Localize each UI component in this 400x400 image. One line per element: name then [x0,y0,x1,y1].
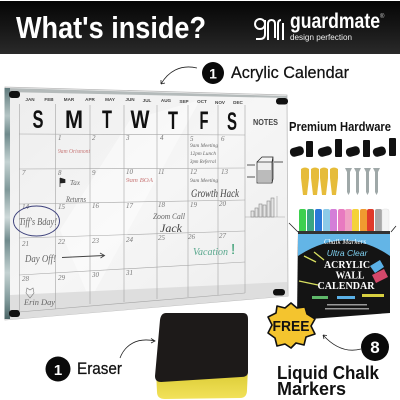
handwritten notes: Erin Day [23,297,55,307]
sketch: bar chart [251,198,274,217]
month row: JAN [25,97,35,102]
date numbers: 8 [58,169,62,177]
panel: acrylic calendar board [4,87,288,320]
circled note [14,206,60,236]
handwritten notes: 3pm Referral [189,158,216,165]
handwritten notes: Returns [65,195,86,204]
month row: FEB [44,97,54,102]
handwritten notes [23,143,240,307]
panel: marker box: Ultra Clear [327,248,368,258]
notes column: NOTES [253,117,278,127]
date numbers: 10 [126,168,134,176]
month row [25,97,244,105]
handwritten notes: 9am Meeting [190,143,218,149]
date numbers: 19 [190,201,198,209]
label: liquid chalk markers: Markers [277,379,346,399]
date numbers: 31 [125,269,133,277]
callout: acrylic calendar [202,62,349,84]
date numbers: 2 [92,134,96,142]
arrow: day off [62,253,104,258]
weekday letters: S [32,106,44,134]
date numbers: 11 [158,168,164,176]
circled note: Tiff's Bday! [19,217,57,228]
handwritten notes: 9am BOA [126,177,153,184]
callout: acrylic calendar: Acrylic Calendar [231,63,349,82]
callout: markers count [361,333,389,361]
date numbers: 9 [92,169,96,177]
date numbers: 18 [158,201,166,209]
date numbers: 4 [160,134,164,142]
panel: eraser [155,313,248,399]
header band [0,1,400,54]
handwritten notes: 9am Meeting [190,178,218,184]
handwritten notes: Vacation [193,246,228,258]
month row: JUN [125,97,135,102]
date numbers: 15 [58,203,66,211]
badge: free [268,303,315,348]
arrow: to calendar [161,67,197,84]
icons: grey screws [345,168,380,195]
logo: guardmate: design perfection [290,33,352,42]
month row: JUL [143,98,152,103]
month row: NOV [215,100,226,105]
panel: marker box [289,223,396,320]
calendar grid [19,104,285,312]
date numbers: 27 [219,232,226,240]
weekday letters: M [65,106,83,134]
date numbers: 20 [219,200,226,208]
arrow: to markers [323,335,361,350]
label: liquid chalk markers [277,363,380,399]
weekday letters: T [168,107,178,135]
date numbers: 3 [125,134,130,142]
panel: marker box: CALENDAR [318,281,375,292]
date numbers: 23 [92,237,100,245]
date numbers: 16 [92,202,100,210]
weekday letters [32,106,237,136]
date numbers: 7 [22,169,26,177]
handwritten notes: Growth Hack [191,186,240,200]
date numbers: 12 [190,168,198,176]
label: liquid chalk markers: Liquid Chalk [277,363,380,383]
month row: DEC [233,100,244,105]
sketch: box [247,157,283,183]
date numbers: 29 [58,274,66,282]
month row: MAR [64,97,75,102]
icons: black standoff barrels [289,138,396,158]
handwritten notes: 12pm Lunch [190,151,216,157]
callout: markers count: 8 [370,338,380,357]
panel: marker box: Chalk Markers [324,238,366,246]
month row: SEP [179,99,189,104]
month row: APR [85,97,96,102]
month row: MAY [105,97,115,102]
date numbers: 1 [58,134,62,142]
notes column [247,117,283,217]
weekday letters: F [200,107,208,135]
month row: OCT [197,99,207,104]
weekday letters: T [102,106,112,134]
callout: acrylic calendar: 1 [209,66,217,82]
reflection bands [60,100,200,300]
handwritten notes: Tax [70,179,81,187]
callout: eraser: Eraser [77,359,122,378]
weekday letters: W [130,106,150,134]
month row: AUG [161,98,172,103]
callout: eraser: 1 [54,362,62,379]
date numbers: 25 [158,234,166,242]
title: What's inside? [16,10,206,45]
date numbers: 28 [22,275,30,283]
date numbers: 5 [190,135,194,143]
mounting pins [9,91,288,317]
logo: guardmate: ® [380,13,385,20]
arrow: to eraser [120,338,155,358]
logo: guardmate [255,10,385,42]
date numbers: 13 [221,168,228,176]
handwritten notes: Zoom Call [153,211,186,221]
panel: marker box: WALL [336,270,364,282]
handwritten notes: Day Off! [24,254,56,265]
date numbers: 26 [188,233,196,241]
date numbers: 21 [22,240,29,248]
date numbers: 30 [91,271,100,279]
weekday letters: S [227,108,237,136]
icons: liquid chalk markers [299,209,389,232]
icons: yellow wall anchors [301,168,338,195]
date numbers: 6 [221,135,225,143]
date numbers: 24 [126,236,134,244]
callout: eraser [46,356,122,382]
handwritten notes: 9am Orismont [58,148,90,155]
handwritten notes: ! [231,241,235,258]
panel: marker box: ACRYLIC [324,260,370,271]
handwritten notes: Jack [160,221,183,235]
date numbers [22,134,228,283]
date numbers: 14 [22,203,30,211]
date numbers: 17 [126,202,134,210]
badge: free: FREE [272,319,310,335]
logo: guardmate: guardmate [290,10,380,33]
date numbers: 22 [58,238,66,246]
